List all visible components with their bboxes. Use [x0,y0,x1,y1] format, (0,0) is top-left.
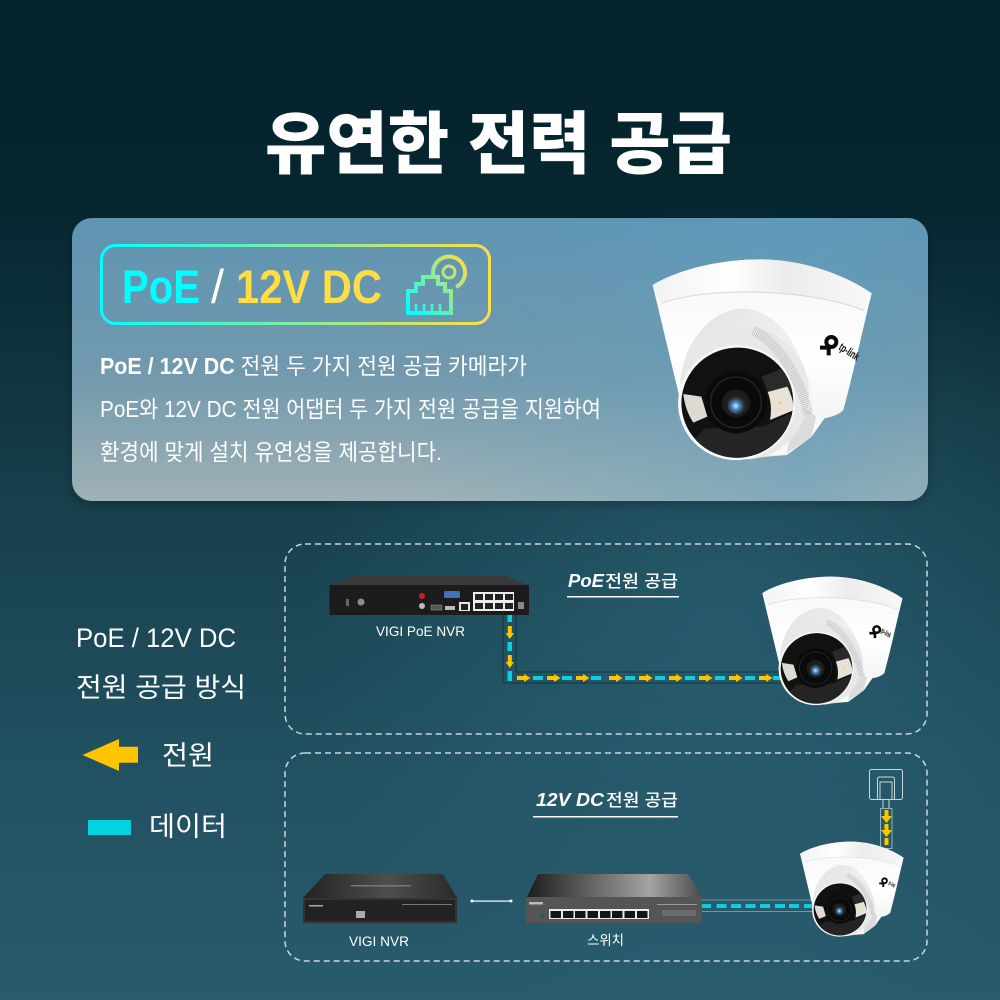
badge: PoE / 12V DC: PoE [122,260,200,313]
device: VIGI NVR [303,874,457,923]
panel: 12V DC power diagram [285,753,927,961]
camera: main turret camera: tp-link [836,341,862,364]
camera: PoE turret camera [762,577,902,714]
legend label: power: 전원 [162,741,214,771]
badge: PoE / 12V DC: / [211,260,225,313]
label: switch: 스위치 [587,933,624,948]
label: 12V DC power: 전원 공급 [606,786,678,811]
legend: power supply methods [76,623,246,842]
icon: ethernet port with power ring [408,257,465,313]
text block: description: 환경에 맞게 설치 유연성을 제공합니다. [100,439,442,465]
legend label: data: 데이터 [149,812,227,842]
label: PoE power: 전원 공급 [605,567,678,592]
camera: main turret camera [653,259,872,473]
arrow: data cable [702,900,814,912]
label: 12V DC power: 12V DC [536,790,605,810]
label: VIGI NVR: VIGI NVR [349,934,409,949]
label: PoE power [567,567,679,598]
title: 유연한 전력 공급 [265,89,732,188]
connector: NVR to switch [470,900,512,902]
arrow: PoE cable with power and data [503,615,783,683]
panel: PoE power diagram [285,544,927,734]
badge: PoE / 12V DC [102,246,490,324]
icon: data dash [88,820,131,835]
camera: DC turret camera [800,842,904,943]
badge: PoE / 12V DC: 12V DC [236,260,382,313]
camera: PoE turret camera: tp-link [879,626,893,640]
label: VIGI PoE NVR: VIGI PoE NVR [376,624,465,639]
arrow: DC power cable [880,808,892,848]
text block: description: PoE / 12V DC 전원 두 가지 전원 공급 카메라가 [100,353,527,379]
legend heading: 전원 공급 방식 [76,673,246,703]
device: switch [526,874,702,923]
camera: DC turret camera: tp-link [887,881,896,890]
label: 12V DC power [533,786,678,818]
icon: power outlet and adapter [870,770,902,808]
text block: description: PoE와 12V DC 전원 어댑터 두 가지 전원 공급을 지원하여 [100,396,601,422]
legend heading [76,623,246,703]
text block: description [100,353,601,465]
label: PoE power: PoE [568,571,605,591]
device: VIGI PoE NVR [330,576,529,615]
icon: power arrow [82,739,138,771]
legend heading: PoE / 12V DC [76,623,236,653]
panel: PoE / 12V DC summary [72,218,928,501]
